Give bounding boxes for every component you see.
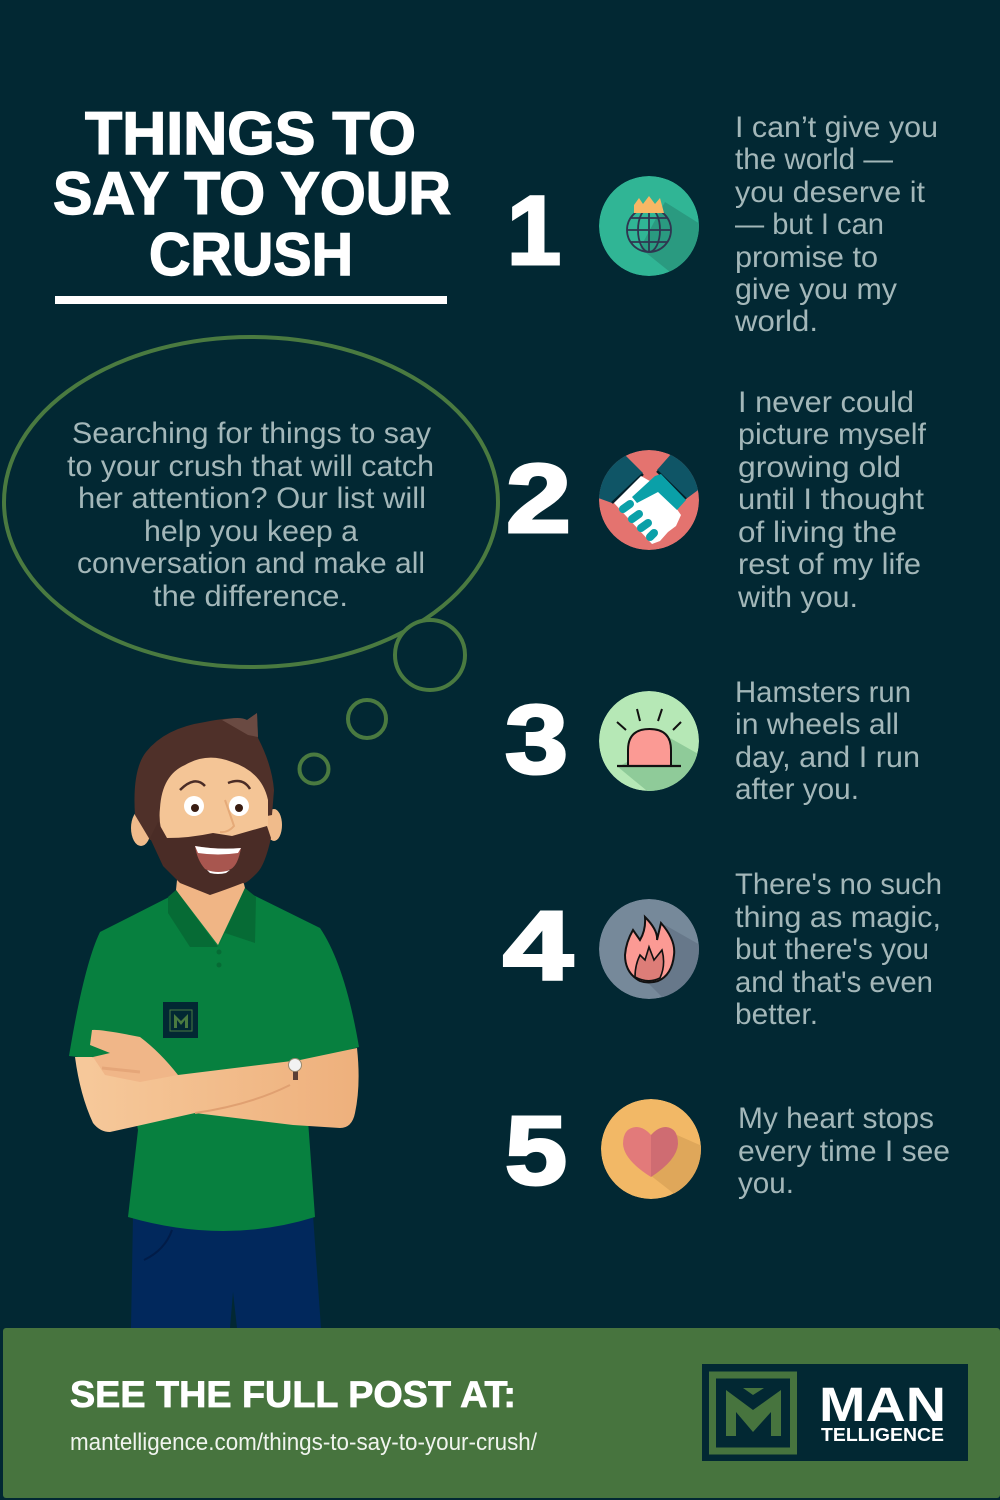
number 1: 1 [507,176,561,285]
tip 4 text: There's no such [735,868,942,901]
tip 1 text: I can’t give you [735,111,938,144]
footer link: mantelligence.com/things-to-say-to-your-crush/ [70,1429,537,1456]
tip 4 text [735,868,942,1031]
tip 5 text: every time I see [738,1135,950,1168]
tip 4 text: and that's even [735,966,933,999]
tip 4 text: better. [735,998,818,1031]
icon: heart [601,1099,702,1200]
title: SAY TO YOUR [53,160,451,227]
number 4: 4 [503,891,573,1000]
beard [150,822,271,895]
tip 1 text [734,111,938,338]
tip 1 text: give you my [735,273,897,306]
brand logo: TELLIGENCE [821,1425,944,1445]
neck [176,880,245,945]
footer heading: SEE THE FULL POST AT: [70,1374,516,1415]
bubble intro text: Searching for things to say [72,417,431,450]
icon: flame [599,899,700,1000]
wristwatch [288,1058,302,1080]
bubble intro text: help you keep a [144,515,358,548]
tip 3 text: Hamsters run [735,676,911,709]
number 2: 2 [506,444,571,553]
tip 3 text: after you. [735,773,859,806]
tip 1 text: world. [734,305,818,338]
title: CRUSH [149,221,353,288]
thought bubble [4,337,498,784]
tip 2 text [737,386,927,614]
number 3: 3 [505,685,568,794]
crown [634,196,664,213]
nose [220,800,234,832]
tip 1 text: you deserve it [735,176,926,209]
tip 1 text: the world — [735,143,893,176]
tip 5 text: you. [738,1167,794,1200]
tip 1 text: — but I can [735,208,884,241]
tip 2 text: rest of my life [738,548,921,581]
mouth [195,846,241,874]
tip 5 text [738,1102,950,1200]
tip 2 text: I never could [738,386,914,419]
globe [627,208,671,252]
tip 5 text: My heart stops [738,1102,934,1135]
tip 2 text: with you. [737,581,858,614]
hair [134,713,274,840]
tip 2 text: until I thought [738,483,925,516]
bubble intro text: her attention? Our list will [78,482,426,515]
icon: globe with crown [599,176,700,280]
tip 1 text: promise to [735,241,878,274]
tip 4 text: thing as magic, [735,901,941,934]
tip 2 text: growing old [738,451,901,484]
bubble intro text: the difference. [153,580,348,613]
brand logo: MAN [819,1379,946,1432]
tip 2 text: picture myself [738,418,927,451]
tip 4 text: but there's you [735,933,929,966]
bubble intro text: conversation and make all [77,547,425,580]
tip 3 text: in wheels all [735,708,899,741]
tip 3 text [735,676,920,806]
icon: siren [599,691,700,795]
tip 3 text: day, and I run [735,741,920,774]
polo shirt [69,890,359,1231]
character: bearded man in green polo [69,713,359,1328]
face [160,758,268,842]
trousers [131,1215,321,1328]
shirt collar [168,888,256,968]
title [53,100,451,304]
ears [131,809,282,846]
brand logo [702,1364,968,1461]
bubble intro text [67,417,434,613]
eyes [180,781,250,816]
crossed arms [75,1030,359,1132]
number 5: 5 [505,1096,567,1205]
chest logo [163,1002,198,1038]
bubble intro text: to your crush that will catch [67,450,434,483]
footer banner [3,1328,1000,1498]
tip 2 text: of living the [738,516,897,549]
icon: handshake [599,450,699,550]
title: THINGS TO [85,100,416,167]
